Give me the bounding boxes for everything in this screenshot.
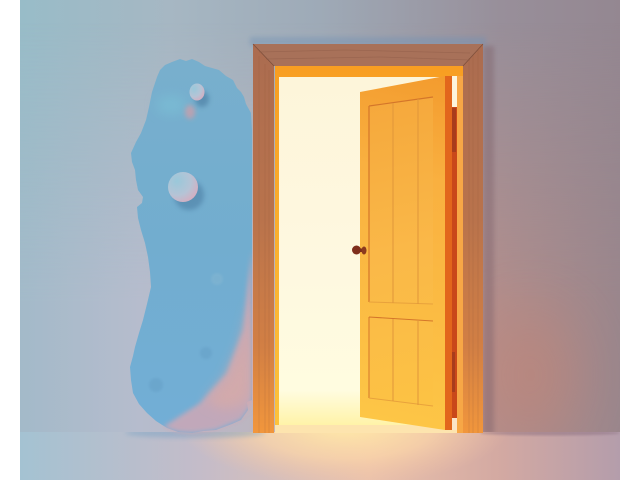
frame lintel	[253, 44, 483, 66]
blue blob on the wall	[130, 59, 252, 433]
small ball	[190, 84, 209, 107]
doorway light	[275, 66, 463, 433]
door knob	[352, 246, 366, 254]
large ball	[168, 172, 204, 210]
blob pink lower fold	[163, 250, 252, 433]
door frame	[253, 44, 483, 433]
frame right jamb	[463, 44, 483, 433]
lower door panel	[369, 317, 433, 406]
open door	[352, 76, 452, 430]
far jamb and slit	[445, 107, 457, 430]
small bumps	[149, 273, 223, 392]
floor	[20, 428, 620, 480]
frame left jamb	[253, 44, 274, 433]
upper door panel	[369, 97, 433, 304]
